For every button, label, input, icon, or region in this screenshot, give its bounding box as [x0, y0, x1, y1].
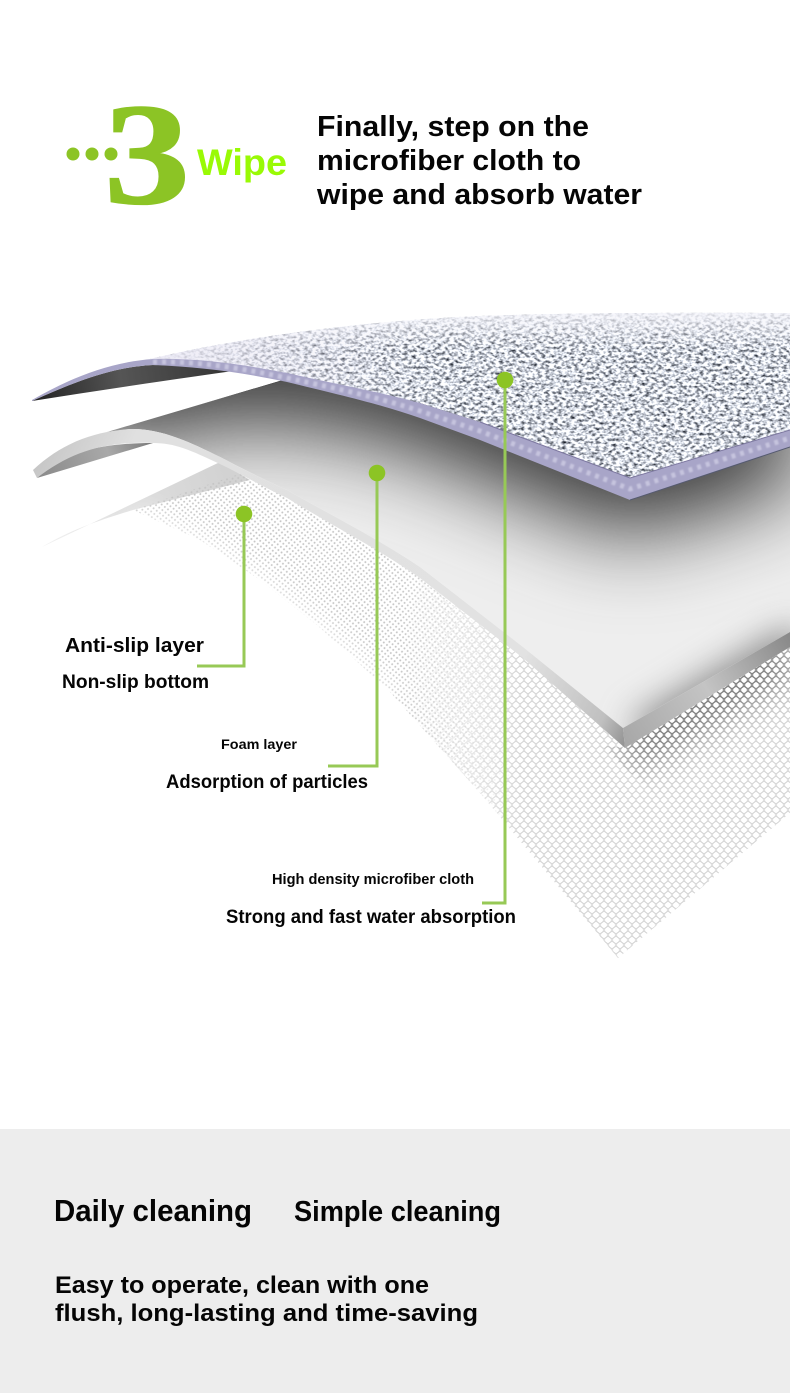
foam layer: [33, 359, 790, 748]
cloth top texture: [140, 305, 790, 485]
hem stitching: [153, 362, 790, 489]
callout: foam layer: [166, 465, 385, 793]
marker dot: [497, 372, 513, 388]
leader line: [197, 514, 244, 666]
heading text: microfiber cloth to: [317, 145, 581, 177]
description text: Easy to operate, clean with one: [55, 1272, 429, 1299]
foam front edge: [33, 429, 625, 748]
icon: three green dots: [66, 148, 118, 160]
heading text: Finally, step on the: [317, 111, 589, 143]
label text: Anti-slip layer: [65, 635, 204, 657]
sub label: Strong and fast water absorption: [226, 907, 516, 928]
heading: simple cleaning: Simple cleaning: [294, 1196, 501, 1228]
marker dot: [236, 506, 252, 522]
callout: anti-slip layer: [62, 506, 252, 693]
microfiber cloth layer: [32, 305, 790, 500]
sub label: Adsorption of particles: [166, 772, 368, 793]
foam right side edge: [623, 632, 790, 748]
foam top surface with shadow from the cloth: [108, 380, 790, 728]
label text: High density microfiber cloth: [272, 871, 474, 888]
header: step number and title: [66, 75, 642, 235]
label text: Foam layer: [221, 736, 298, 752]
cloth underside: [32, 365, 233, 401]
cloth lavender hem: [32, 359, 790, 500]
anti-slip mesh layer: [42, 462, 790, 958]
description text: flush, long-lasting and time-saving: [55, 1300, 478, 1327]
callout: microfiber cloth: [226, 372, 516, 928]
sub label: Non-slip bottom: [62, 672, 209, 693]
layered cloth illustration: [32, 305, 790, 958]
step name: Wipe: Wipe: [197, 142, 287, 183]
heading: daily cleaning: Daily cleaning: [54, 1193, 252, 1228]
step number 3: 3: [104, 75, 190, 235]
heading text: wipe and absorb water: [316, 179, 642, 211]
leader line: [328, 473, 377, 766]
foam underside: [37, 443, 153, 478]
marker dot: [369, 465, 385, 481]
heading text: [316, 111, 642, 211]
leader line: [482, 380, 505, 903]
description text: [55, 1272, 478, 1327]
panel: bottom summary: [0, 1129, 790, 1393]
